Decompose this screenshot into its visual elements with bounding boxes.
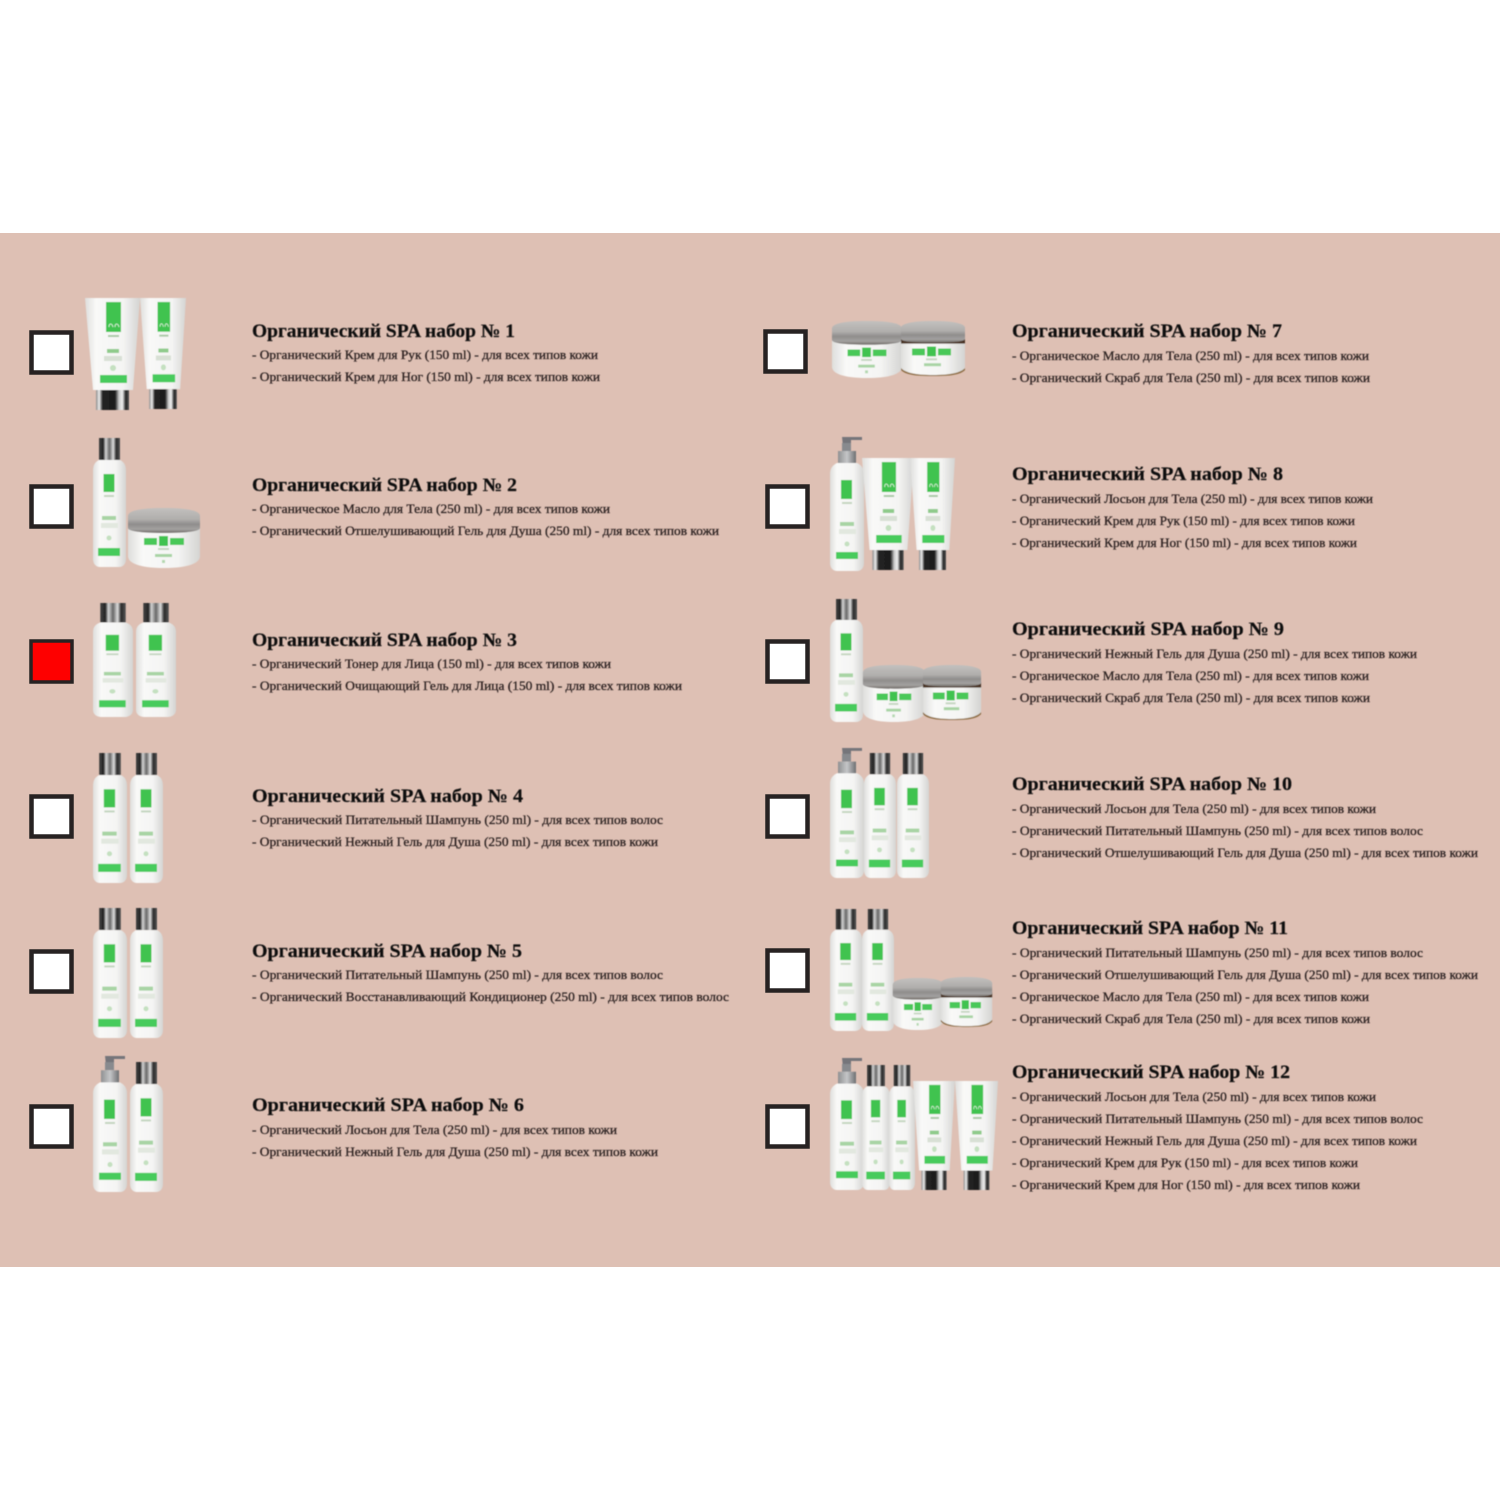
text 9: - Органический Нежный Гель для Душа (250 ml) - для всех типов кожи [1012,647,1417,661]
text 8: - Органический Крем для Рук (150 ml) - для всех типов кожи [1012,514,1355,528]
checkbox 5 [32,952,72,992]
text 11: - Органический Отшелушивающий Гель для Душа (250 ml) - для всех типов кожи [1012,968,1478,982]
text 11 [1012,918,1478,1026]
text 6: - Органический Нежный Гель для Душа (250 ml) - для всех типов кожи [252,1145,658,1159]
text 9 [1012,619,1417,705]
checkbox 6 [32,1106,72,1146]
text 7: - Органический Скраб для Тела (250 ml) - для всех типов кожи [1012,371,1370,385]
text 3 [252,630,682,693]
text 5: - Органический Питательный Шампунь (250 ml) - для всех типов волос [252,968,663,982]
text 12: - Органический Крем для Рук (150 ml) - для всех типов кожи [1012,1156,1358,1170]
products 12 [830,1058,998,1190]
set 9 [768,599,1417,722]
text 7 [1012,321,1370,385]
text 10: Органический SPA набор № 10 [1012,774,1292,795]
checkbox 2 [32,486,72,526]
text 8: Органический SPA набор № 8 [1012,464,1283,485]
products 10 [830,748,929,878]
text 5: - Органический Восстанавливающий Кондиционер (250 ml) - для всех типов волос [252,990,729,1004]
products 2 [93,438,200,568]
text 1 [252,321,600,384]
text 5 [252,941,729,1004]
checkbox 10 [768,796,808,836]
text 12 [1012,1062,1423,1192]
text 11: Органический SPA набор № 11 [1012,918,1288,939]
text 12: - Органический Крем для Ног (150 ml) - для всех типов кожи [1012,1178,1360,1192]
set 6 [32,1056,658,1192]
text 1: - Органический Крем для Ног (150 ml) - для всех типов кожи [252,370,600,384]
text 12: Органический SPA набор № 12 [1012,1062,1290,1083]
text 11: - Органическое Масло для Тела (250 ml) - для всех типов кожи [1012,990,1369,1004]
products 8 [830,437,955,571]
checkbox 9 [768,642,808,682]
text 10: - Органический Отшелушивающий Гель для Душа (250 ml) - для всех типов кожи [1012,846,1478,860]
text 4 [252,786,663,849]
text 1: Органический SPA набор № 1 [252,321,515,342]
set 4 [32,753,663,883]
text 1: - Органический Крем для Рук (150 ml) - для всех типов кожи [252,348,598,362]
set 10 [768,748,1478,878]
checkbox 3 selected red [31,641,72,682]
text 7: Органический SPA набор № 7 [1012,321,1283,342]
text 12: - Органический Нежный Гель для Душа (250 ml) - для всех типов кожи [1012,1134,1417,1148]
text 3: - Органический Тонер для Лица (150 ml) - для всех типов кожи [252,657,611,671]
products 3 [93,603,176,717]
checkbox 8 [768,486,808,526]
panel: product sets background [0,233,1500,1267]
text 12: - Органический Лосьон для Тела (250 ml) - для всех типов кожи [1012,1090,1376,1104]
set 2 [32,438,719,568]
products 7 [832,321,965,378]
text 9: - Органическое Масло для Тела (250 ml) - для всех типов кожи [1012,669,1369,683]
text 2: - Органическое Масло для Тела (250 ml) - для всех типов кожи [252,502,610,516]
text 8: - Органический Лосьон для Тела (250 ml) - для всех типов кожи [1012,492,1373,506]
text 10: - Органический Питательный Шампунь (250 ml) - для всех типов волос [1012,824,1423,838]
text 9: - Органический Скраб для Тела (250 ml) - для всех типов кожи [1012,691,1370,705]
products 5 [93,908,163,1038]
text 11: - Органический Скраб для Тела (250 ml) - для всех типов кожи [1012,1012,1370,1026]
set 11 [768,909,1478,1031]
products 9 [830,599,981,722]
text 4: - Органический Нежный Гель для Душа (250 ml) - для всех типов кожи [252,835,658,849]
text 6: - Органический Лосьон для Тела (250 ml) - для всех типов кожи [252,1123,617,1137]
set 8 [768,437,1373,571]
text 6 [252,1095,658,1159]
set 3 selected [31,603,682,717]
checkbox 7 [766,332,806,372]
text 10 [1012,774,1478,860]
text 10: - Органический Лосьон для Тела (250 ml) - для всех типов кожи [1012,802,1376,816]
set 12 [768,1058,1423,1192]
products 4 [93,753,163,883]
text 8: - Органический Крем для Ног (150 ml) - для всех типов кожи [1012,536,1357,550]
text 4: Органический SPA набор № 4 [252,786,524,807]
text 9: Органический SPA набор № 9 [1012,619,1284,640]
text 4: - Органический Питательный Шампунь (250 ml) - для всех типов волос [252,813,663,827]
set 7 [766,321,1370,385]
set 5 [32,908,729,1038]
text 6: Органический SPA набор № 6 [252,1095,524,1116]
text 2: - Органический Отшелушивающий Гель для Душа (250 ml) - для всех типов кожи [252,524,719,538]
text 2 [252,475,719,538]
checkbox 1 [32,332,72,372]
text 2: Органический SPA набор № 2 [252,475,517,496]
text 11: - Органический Питательный Шампунь (250 ml) - для всех типов волос [1012,946,1423,960]
text 3: - Органический Очищающий Гель для Лица (150 ml) - для всех типов кожи [252,679,682,693]
checkbox 12 [768,1106,808,1146]
set 1 [32,298,600,410]
text 8 [1012,464,1373,550]
products 11 [830,909,992,1031]
products 6 [93,1056,163,1192]
checkbox 11 [768,950,808,990]
checkbox 4 [32,796,72,836]
text 7: - Органическое Масло для Тела (250 ml) - для всех типов кожи [1012,349,1369,363]
text 5: Органический SPA набор № 5 [252,941,522,962]
text 3: Органический SPA набор № 3 [252,630,517,651]
text 12: - Органический Питательный Шампунь (250 ml) - для всех типов волос [1012,1112,1423,1126]
products 1 [85,298,186,410]
